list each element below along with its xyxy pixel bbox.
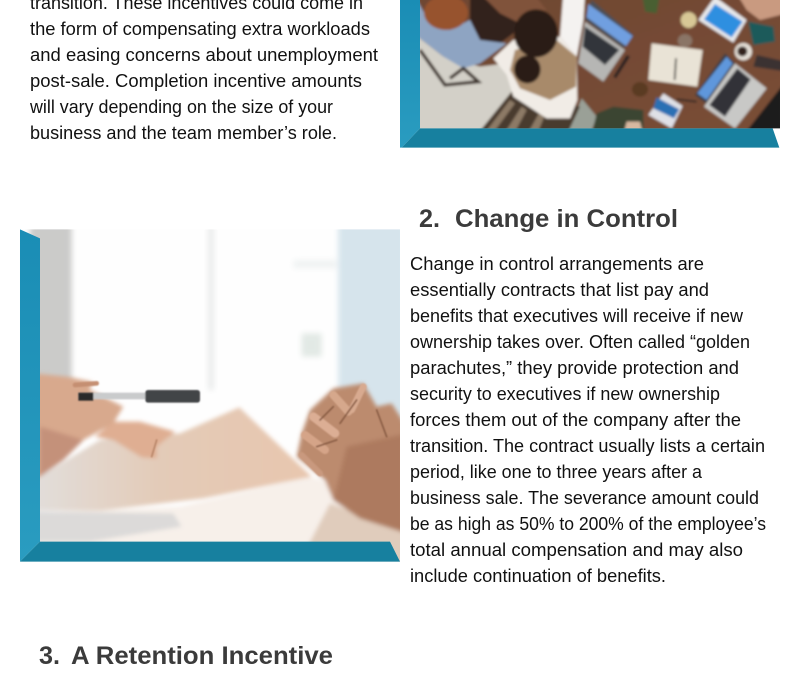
- text block: change in control paragraph: forces them out of the company after the: [410, 410, 741, 430]
- text block: completion incentive paragraph: [29, 0, 378, 143]
- text block: completion incentive paragraph: the form of compensating extra workloads: [30, 19, 370, 39]
- pen: [78, 390, 200, 403]
- text block: completion incentive paragraph: and easing concerns about unemployment: [30, 45, 378, 65]
- frame: left bar: [20, 229, 40, 562]
- text block: change in control paragraph: security to executives if new ownership: [410, 384, 720, 404]
- text block: change in control paragraph: be as high as 50% to 200% of the employee’s: [410, 514, 766, 534]
- text block: change in control paragraph: parachutes,” they provide protection and: [410, 358, 739, 378]
- text block: change in control paragraph: benefits that executives will receive if new: [410, 306, 744, 326]
- text block: change in control paragraph: Change in control arrangements are: [410, 254, 704, 274]
- text block: completion incentive paragraph: business and the team member’s role.: [30, 123, 337, 143]
- text block: completion incentive paragraph: will vary depending on the size of your: [29, 97, 333, 117]
- text block: change in control paragraph: business sale. The severance amount could: [410, 488, 759, 508]
- heading: 2. Change in Control: Change in Control: [455, 205, 678, 233]
- frame: bottom bar: [20, 542, 400, 562]
- frame: bottom bar: [402, 128, 779, 148]
- right hand finger highlights: [75, 383, 387, 473]
- photo: team working at a table with blue frame: [400, 0, 787, 148]
- frame: left bar: [400, 0, 420, 148]
- text block: change in control paragraph: transition. The contract usually lists a certain: [410, 436, 765, 456]
- text block: change in control paragraph: include continuation of benefits.: [410, 566, 666, 586]
- text block: change in control paragraph: essentially contracts that list pay and: [410, 280, 709, 300]
- heading: 3. A Retention Incentive: A Retention Incentive: [71, 642, 333, 670]
- text block: change in control paragraph: [410, 254, 766, 586]
- text block: completion incentive paragraph: post-sale. Completion incentive amounts: [30, 71, 362, 91]
- photo: handing over a contract and pen with blue frame: [20, 223, 407, 568]
- heading: 2. Change in Control: 2.: [419, 205, 440, 233]
- text block: change in control paragraph: total annual compensation and may also: [410, 540, 743, 560]
- heading: 3. A Retention Incentive: 3.: [39, 642, 60, 670]
- text block: change in control paragraph: period, like one to three years after a: [410, 462, 703, 482]
- text block: change in control paragraph: ownership takes over. Often called “golden: [410, 332, 750, 352]
